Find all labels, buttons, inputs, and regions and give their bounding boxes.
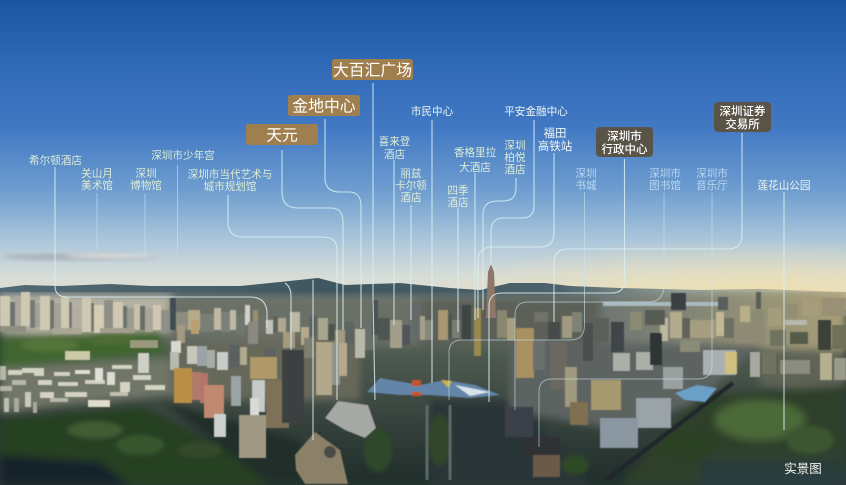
line: Four Seasons xyxy=(457,208,459,332)
label: Futian Railway Station: 福田 xyxy=(544,126,566,140)
line: Guanshanyue xyxy=(96,193,98,250)
diagonal road xyxy=(606,383,733,480)
badge: Tianyuan: 天元 xyxy=(266,128,298,144)
label: Futian Railway Station: 高铁站 xyxy=(538,139,573,153)
right distant buildings xyxy=(603,302,720,306)
line: contemporary art museum xyxy=(228,195,337,400)
label: Concert Hall: 深圳市 xyxy=(696,167,728,180)
line: Ritz Carlton xyxy=(410,205,412,320)
line: Library xyxy=(515,193,664,410)
civic centre roof xyxy=(367,378,500,398)
line: cultural centre xyxy=(312,280,314,440)
tree canopy mottling xyxy=(20,335,834,475)
label: Sheraton Hotel: 酒店 xyxy=(384,148,405,161)
line: Book City xyxy=(449,192,584,400)
label: Book City: 书城 xyxy=(575,180,597,192)
line: Stock Exchange badge xyxy=(554,133,742,322)
badge: Stock Exchange xyxy=(714,102,771,132)
label: Four Seasons Hotel: 四季 xyxy=(447,185,469,197)
badge: Administrative Center: 深圳市 xyxy=(607,129,642,143)
caption: real scene photo: 实景图 xyxy=(784,461,822,476)
leader lines xyxy=(55,83,784,447)
label: Ritz Carlton Hotel: 卡尔顿 xyxy=(395,179,427,192)
label: Book City: 深圳 xyxy=(575,168,597,180)
buildings xyxy=(0,292,846,484)
low residential rows left xyxy=(0,365,165,413)
podium buildings at bottom xyxy=(505,407,533,437)
label: Library: 图书馆 xyxy=(649,179,681,192)
label: Hilton Hotel: 希尔顿酒店 xyxy=(29,154,82,167)
line: Shenzhen Museum xyxy=(144,194,146,258)
label: Contemporary Art and Urban Planning Museum: 深圳市当代艺术与 xyxy=(188,168,272,181)
label: Shenzhen Museum: 深圳 xyxy=(135,168,157,180)
label: Ritz Carlton Hotel: 丽兹 xyxy=(400,168,422,180)
line: Shangri-La xyxy=(474,173,476,320)
central towers xyxy=(516,328,534,378)
label: Ping An Finance Centre: 平安金融中心 xyxy=(504,105,568,118)
line: Civic Center badge xyxy=(489,159,624,402)
badge: Baibaihui Plaza: 大百汇广场 xyxy=(333,62,412,80)
badge: Administrative Center xyxy=(596,127,653,157)
badge: Stock Exchange: 交易所 xyxy=(725,117,760,131)
ground base xyxy=(0,292,846,485)
label: Shenzhen Museum: 博物馆 xyxy=(130,179,162,192)
line: Gemdale Centre xyxy=(325,119,361,328)
label: Shangri-La Hotel: 大酒店 xyxy=(459,161,491,174)
line: Futian station xyxy=(478,153,554,318)
lake xyxy=(675,385,717,402)
park midrise blocks xyxy=(65,351,90,360)
label: Park Hyatt Hotel: 深圳 xyxy=(504,140,526,152)
line: Children's Palace xyxy=(176,165,178,255)
Ping An Finance Centre tower xyxy=(486,264,496,318)
line: short left curve xyxy=(285,283,291,350)
badge: Stock Exchange: 深圳证券 xyxy=(720,104,766,118)
line: Civic Center xyxy=(431,120,433,383)
label: Lianhuashan Park: 莲花山公园 xyxy=(758,179,810,192)
label: Library: 深圳市 xyxy=(649,167,681,180)
museum xyxy=(325,401,376,438)
label: Guanshanyue Art Museum: 美术馆 xyxy=(81,179,113,192)
cloud band on the left horizon xyxy=(2,254,158,260)
line: Baibaihui Plaza xyxy=(373,83,375,400)
label: Sheraton Hotel: 喜来登 xyxy=(379,135,411,148)
label: Four Seasons Hotel: 酒店 xyxy=(447,196,469,209)
line: Sheraton xyxy=(393,160,395,325)
line: Concert Hall xyxy=(539,193,712,447)
line: Lianhuashan Park xyxy=(783,192,785,430)
label: Shangri-La Hotel: 香格里拉 xyxy=(454,146,497,159)
sky background xyxy=(0,0,846,305)
label: Park Hyatt Hotel: 酒店 xyxy=(504,163,526,176)
badge: Gemdale Centre: 金地中心 xyxy=(292,98,356,116)
label: Civic Center: 市民中心 xyxy=(411,105,454,118)
badge: Administrative Center: 行政中心 xyxy=(602,142,648,156)
cultural centre xyxy=(295,432,348,484)
mountains xyxy=(0,278,846,310)
line: Tianyuan xyxy=(282,150,343,330)
line: Hilton xyxy=(55,167,267,328)
line: Park Hyatt xyxy=(483,178,516,310)
line: Ping An xyxy=(491,120,534,265)
label: Park Hyatt Hotel: 柏悦 xyxy=(504,151,526,164)
badge: Tianyuan xyxy=(246,124,318,145)
label: Guanshanyue Art Museum: 关山月 xyxy=(81,167,113,180)
far left skyline xyxy=(0,292,170,334)
middle far skyline xyxy=(170,298,609,358)
gold and pink towers xyxy=(174,368,192,403)
label: Children's Palace: 深圳市少年宫 xyxy=(151,149,215,162)
aerial city photo xyxy=(0,264,846,485)
label: Concert Hall: 音乐厅 xyxy=(696,179,728,192)
label: Contemporary Art and Urban Planning Museum: 城市规划馆 xyxy=(204,180,256,193)
civic square walkways xyxy=(427,405,450,480)
label: Ritz Carlton Hotel: 酒店 xyxy=(400,191,422,204)
